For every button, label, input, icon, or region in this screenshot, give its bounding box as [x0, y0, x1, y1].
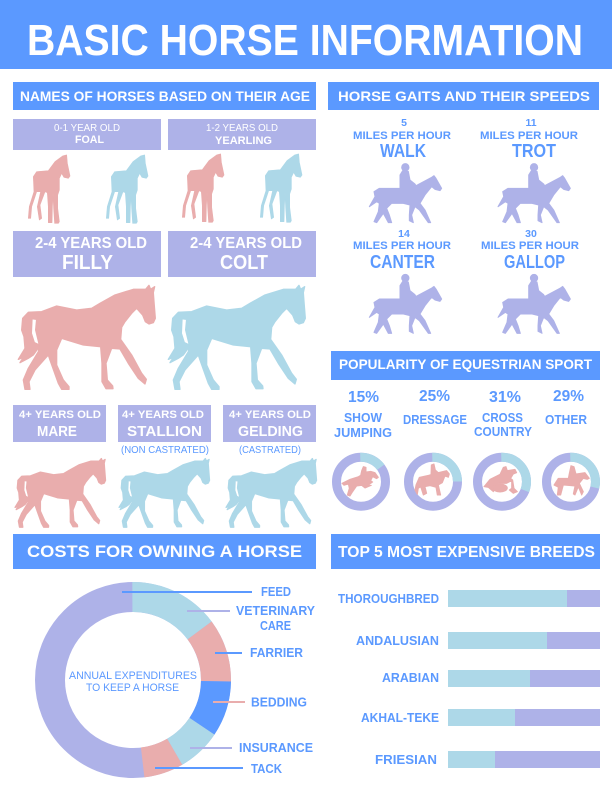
bar: friesian	[375, 751, 600, 768]
label: stallion: 4+ YEARS OLD	[122, 409, 204, 421]
label: filly: 2-4 YEARS OLD	[35, 235, 147, 252]
icon: blue yearling	[260, 154, 302, 222]
heading: top 5 breeds	[331, 534, 600, 569]
callout: tack: TACK	[251, 762, 282, 776]
heading: top 5 breeds: TOP 5 MOST EXPENSIVE BREEDS	[338, 544, 595, 561]
callout: veterinary care: CARE	[260, 619, 291, 633]
sport: other: OTHER	[545, 413, 587, 427]
panel: top 5 most expensive breeds	[331, 534, 600, 768]
note: castrated: (CASTRATED)	[239, 445, 301, 456]
icon: gelding horse	[226, 459, 317, 527]
bar: thoroughbred: THOROUGHBRED	[338, 592, 439, 606]
donut centre label: TO KEEP A HORSE	[86, 682, 179, 694]
heading: costs	[13, 534, 316, 569]
bar: andalusian: ANDALUSIAN	[356, 634, 439, 648]
note: non castrated: (NON CASTRATED)	[121, 445, 209, 456]
sport: other: 29%	[553, 388, 584, 405]
bar: thoroughbred	[338, 590, 600, 607]
gait: canter: 14	[398, 228, 410, 240]
bar: akhal-teke	[361, 709, 600, 726]
heading: popularity: POPULARITY OF EQUESTRIAN SPORT	[339, 356, 592, 372]
gait: canter	[353, 228, 451, 333]
bar: arabian	[382, 670, 600, 687]
icon: colt horse	[168, 285, 305, 389]
donut centre label	[69, 670, 197, 694]
heading: names of horses	[13, 82, 316, 110]
sport: dressage: DRESSAGE	[403, 413, 467, 427]
label: gelding	[223, 405, 316, 442]
gait: walk	[353, 117, 451, 223]
icon: pink yearling	[182, 154, 224, 222]
callout: bedding	[213, 696, 307, 710]
sport: cross country: 31%	[489, 389, 521, 406]
heading: horse gaits: HORSE GAITS AND THEIR SPEEDS	[338, 88, 590, 104]
gait: canter: CANTER	[370, 252, 435, 272]
gait: trot: MILES PER HOUR	[480, 130, 578, 142]
callout: farrier	[215, 646, 303, 660]
sport: show jumping	[334, 389, 392, 506]
sport: show jumping: 15%	[348, 389, 379, 406]
gait: canter: MILES PER HOUR	[353, 240, 451, 252]
gait: walk: WALK	[380, 141, 426, 161]
label: filly: FILLY	[62, 252, 114, 274]
callout: bedding: BEDDING	[251, 696, 307, 710]
icon: blue foal	[106, 155, 148, 223]
gait: trot: 11	[525, 117, 537, 129]
label: foal: FOAL	[75, 134, 104, 146]
label: yearling	[168, 119, 316, 150]
callout: veterinary care	[187, 604, 316, 633]
label: colt: COLT	[220, 252, 268, 274]
label: yearling: 1-2 YEARS OLD	[206, 122, 278, 134]
label: colt	[168, 231, 316, 277]
label: yearling: YEARLING	[215, 135, 272, 147]
sport: cross country: COUNTRY	[474, 425, 533, 439]
icon: pink foal	[28, 155, 70, 223]
label: foal	[13, 119, 161, 150]
gait: gallop	[481, 228, 579, 333]
bar: friesian: FRIESIAN	[375, 753, 437, 767]
gait: walk: MILES PER HOUR	[353, 130, 451, 142]
bar: akhal-teke: AKHAL-TEKE	[361, 711, 439, 725]
sport: dressage: 25%	[419, 388, 450, 405]
callout: insurance: INSURANCE	[239, 741, 313, 755]
title banner	[0, 0, 612, 69]
label: gelding: 4+ YEARS OLD	[229, 409, 311, 421]
donut centre label: ANNUAL EXPENDITURES	[69, 670, 197, 682]
callout: insurance	[190, 741, 313, 755]
heading: costs: COSTS FOR OWNING A HORSE	[27, 543, 302, 561]
gait: walk: 5	[401, 117, 407, 129]
label: mare: 4+ YEARS OLD	[19, 409, 101, 421]
sport: show jumping: JUMPING	[334, 426, 392, 440]
label: gelding: GELDING	[238, 423, 303, 440]
label: mare: MARE	[37, 423, 77, 440]
sport: show jumping: SHOW	[344, 411, 382, 425]
gait: gallop: MILES PER HOUR	[481, 240, 579, 252]
label: foal: 0-1 YEAR OLD	[54, 122, 120, 134]
gait: gallop: 30	[525, 228, 537, 240]
callout: tack	[155, 762, 282, 776]
gait: gallop: GALLOP	[504, 252, 565, 272]
label: filly	[13, 231, 161, 277]
sport: dressage	[403, 388, 467, 506]
panel: popularity of equestrian sport	[331, 351, 600, 506]
callout: farrier: FARRIER	[250, 646, 303, 660]
bar: andalusian	[356, 632, 600, 649]
icon: mare horse	[15, 459, 106, 527]
callout: veterinary care: VETERINARY	[236, 604, 316, 618]
heading: popularity	[331, 351, 600, 380]
sport: cross country	[474, 389, 533, 506]
label: stallion: STALLION	[127, 423, 202, 440]
callout: feed: FEED	[261, 585, 291, 599]
gait: trot	[480, 117, 578, 223]
label: stallion	[118, 405, 211, 442]
label: colt: 2-4 YEARS OLD	[190, 235, 302, 252]
bar: arabian: ARABIAN	[382, 671, 439, 685]
icon: filly horse	[18, 285, 155, 389]
label: mare	[13, 405, 106, 442]
panel: horse gaits and speeds	[328, 82, 599, 333]
gait: trot: TROT	[512, 141, 556, 161]
icon: stallion horse	[119, 459, 210, 527]
sport: other	[545, 388, 596, 506]
panel: names of horses based on age	[13, 82, 317, 527]
donut chart	[50, 597, 216, 763]
sport: cross country: CROSS	[482, 411, 523, 425]
heading: horse gaits	[328, 82, 599, 110]
panel: costs for owning a horse	[13, 534, 316, 776]
heading: names of horses: NAMES OF HORSES BASED ON THEIR AGE	[20, 88, 310, 104]
